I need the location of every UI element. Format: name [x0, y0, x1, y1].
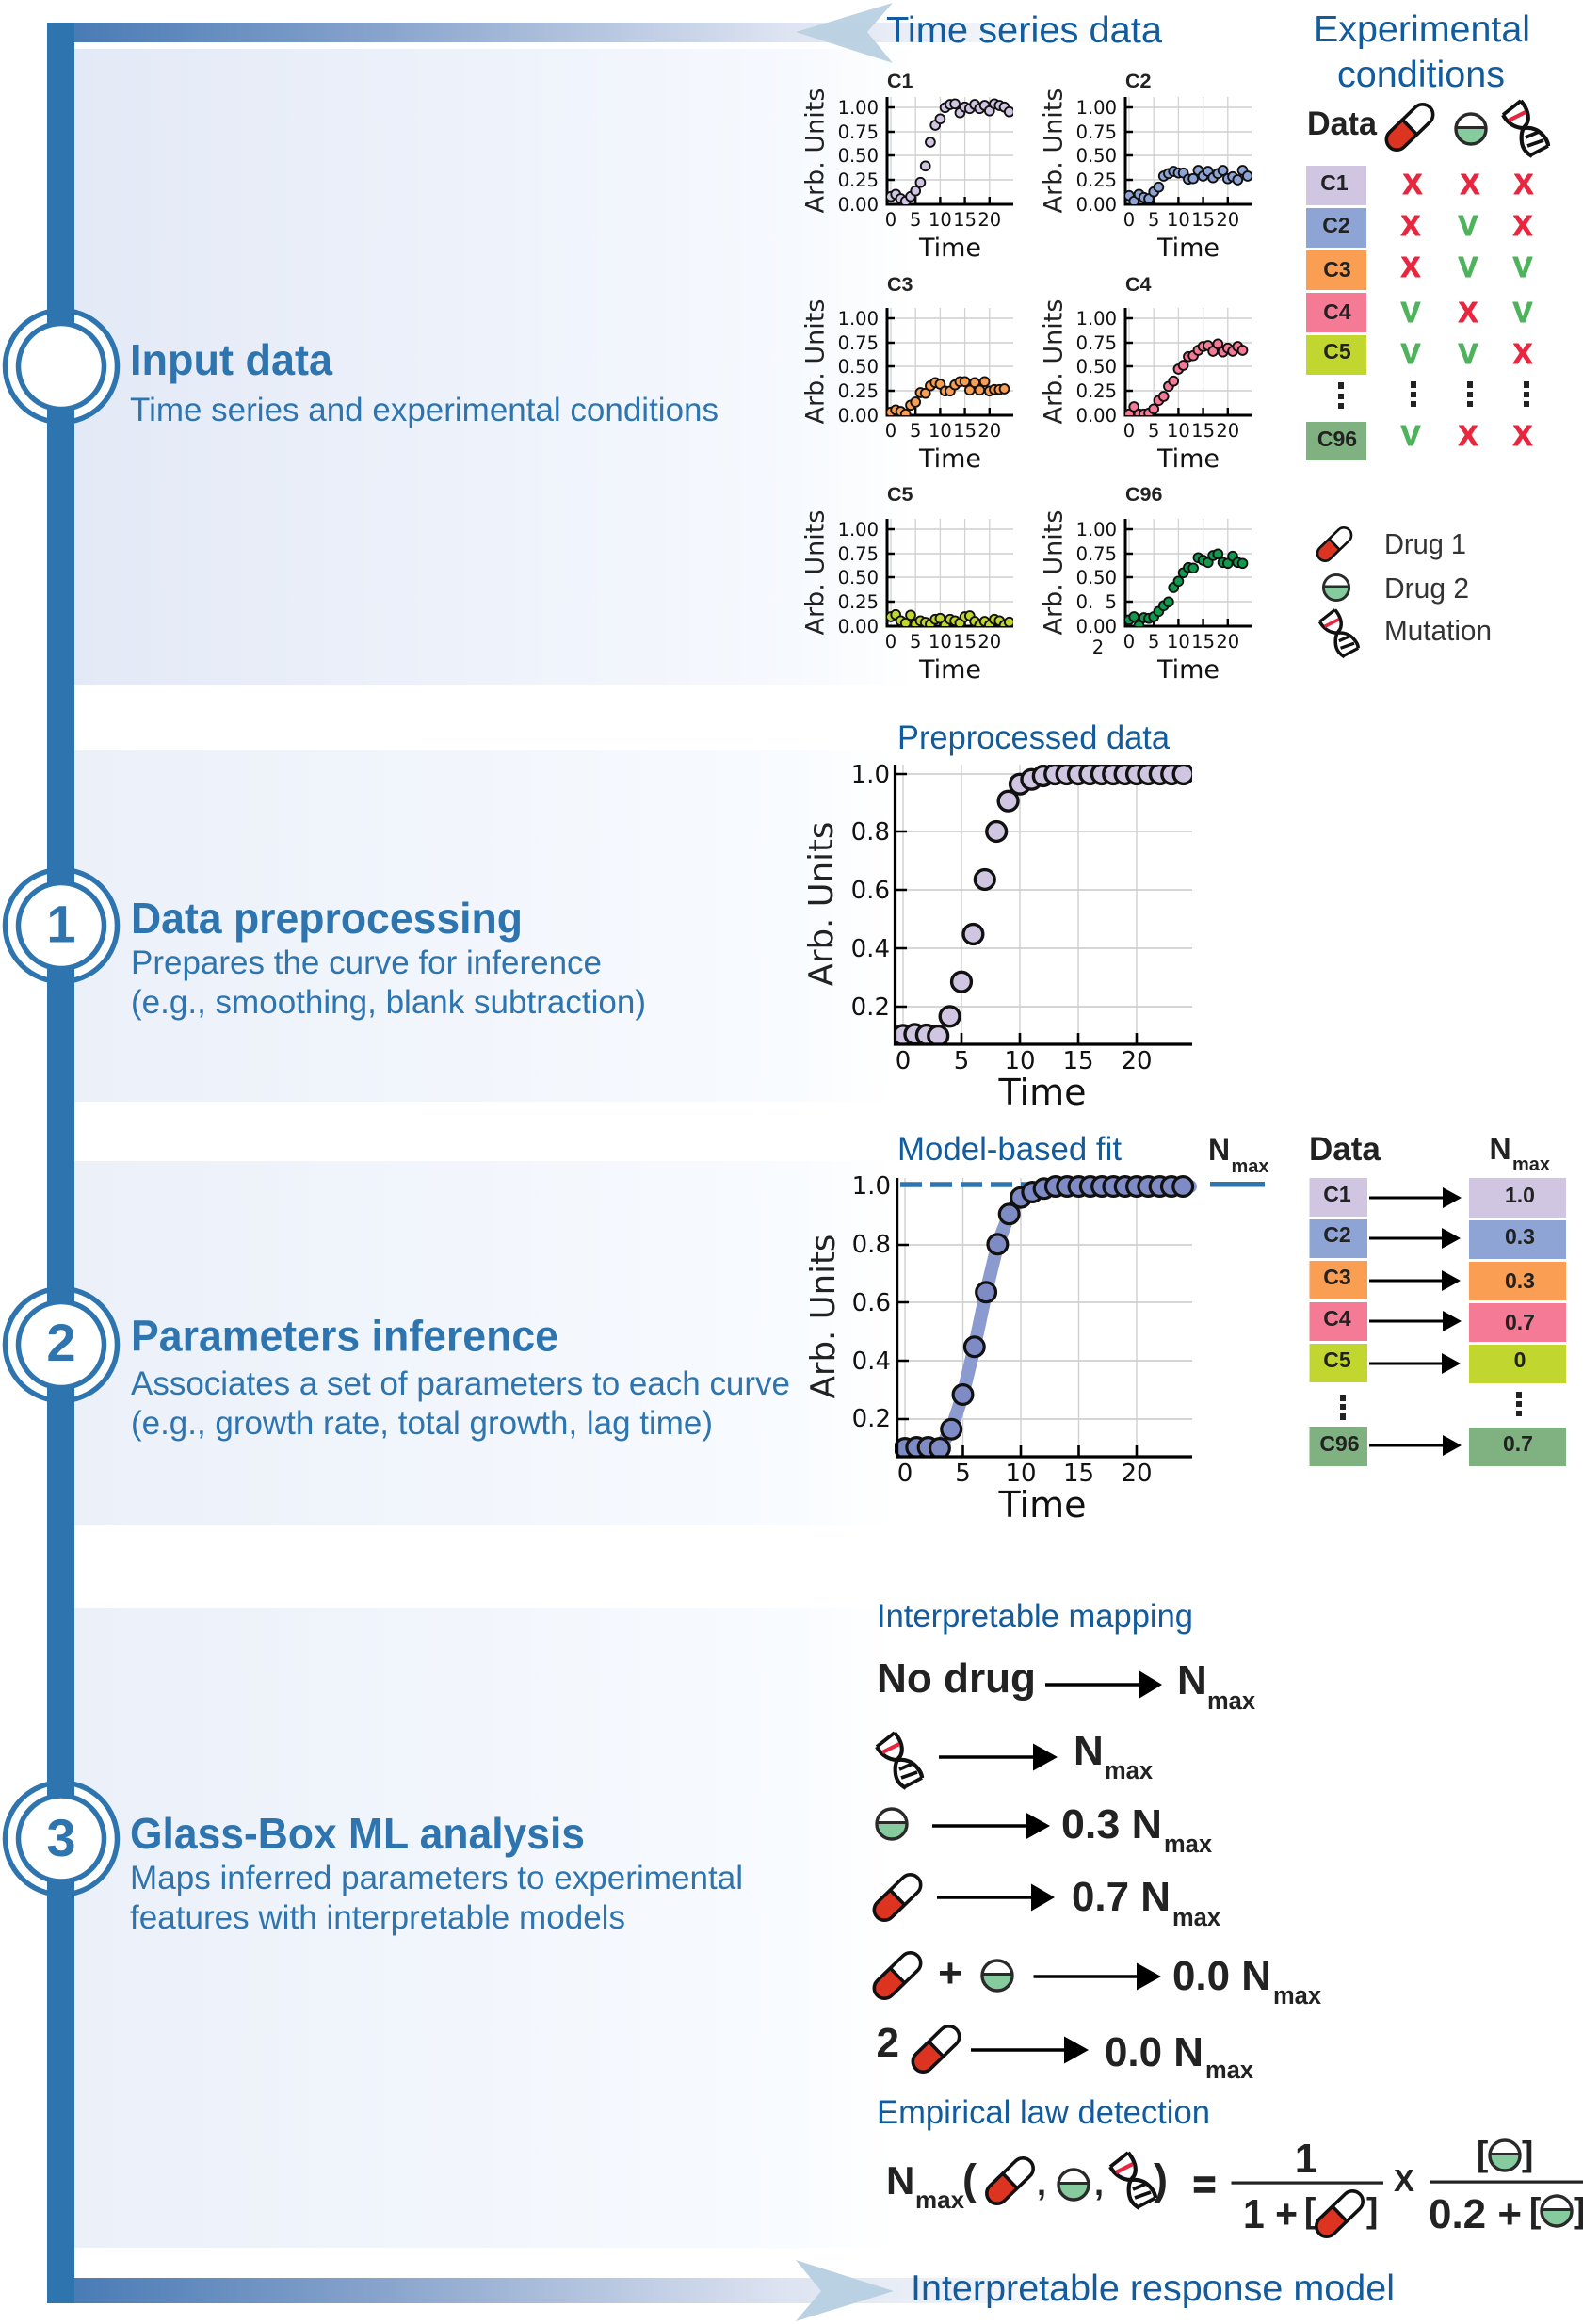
chart: C2 time series: 10	[1167, 209, 1190, 231]
chart: C3 time series	[800, 273, 1013, 474]
chart: C2 time series: 0.00	[1076, 194, 1117, 216]
chart: preprocessed data curve: 0.2	[851, 993, 890, 1022]
formula: empirical law: ,	[1037, 2164, 1046, 2203]
row C96: C96	[1317, 427, 1357, 451]
row C1: X	[1461, 168, 1480, 201]
legend: drug 1, drug 2, mutation	[1315, 525, 1492, 657]
chart: model-based fit curve: 0.4	[852, 1348, 891, 1376]
row C5: C5	[1323, 1348, 1351, 1372]
text block: parameters inference: Parameters inference	[131, 1311, 558, 1360]
Nmax line label: N	[1208, 1133, 1230, 1167]
bottom gradient band	[74, 2278, 1130, 2303]
mapping: drug 1 plus drug 2	[870, 1948, 1321, 2009]
row C3: C3	[1323, 257, 1351, 282]
chart: model-based fit curve: Time	[998, 1484, 1087, 1525]
formula: empirical law: [	[1477, 2135, 1488, 2173]
chart: preprocessed data curve: 20	[1121, 1047, 1153, 1075]
mapping: double drug 1: 2	[876, 2020, 899, 2066]
formula: empirical law: X	[1394, 2163, 1414, 2198]
chart: C5 time series: 0.00	[838, 616, 879, 637]
outer ring step 2	[6, 1288, 117, 1401]
formula: empirical law: [	[1529, 2191, 1541, 2230]
Nmax line label	[1208, 1133, 1269, 1186]
chart: C4 time series	[1040, 273, 1252, 474]
step badge: input data	[19, 324, 104, 409]
table: inferred Nmax per curve	[1309, 1131, 1566, 1466]
row C4: C4	[1323, 1306, 1351, 1331]
chart: C5 time series: 0	[885, 631, 896, 653]
text block: data preprocessing: (e.g., smoothing, blank subtraction)	[131, 983, 646, 1021]
table header	[1309, 1131, 1550, 1175]
mapping: no drug	[877, 1655, 1255, 1715]
chart: C3 time series: Time	[918, 444, 981, 474]
heading: experimental conditions	[1314, 9, 1530, 95]
chart: C4 time series: Time	[1156, 444, 1220, 474]
chart: C96 time series: 15	[1191, 631, 1215, 653]
top gradient band	[74, 23, 1130, 42]
formula: empirical law: 1	[1295, 2136, 1317, 2182]
chart: C2 time series: 20	[1216, 209, 1239, 231]
chart: preprocessed data curve: 0.8	[851, 818, 890, 847]
heading: interpretable mapping: Interpretable mapping	[877, 1598, 1193, 1635]
row C5	[1306, 335, 1533, 375]
step badge: 2	[19, 1301, 104, 1388]
step badge: 3: 3	[46, 1808, 76, 1867]
heading: time series data: Time series data	[886, 10, 1162, 51]
chart: C1 time series: 0.50	[838, 145, 879, 167]
mapping: double drug 1: max	[1205, 2058, 1253, 2084]
mapping: mutation: N	[1074, 1728, 1104, 1774]
chart: preprocessed data curve: 0	[896, 1047, 911, 1075]
chart: C4 time series: 20	[1216, 420, 1239, 442]
text block: input data: Time series and experimental conditions	[130, 391, 719, 428]
chart: model-based fit curve: 0.2	[852, 1405, 891, 1433]
row C1: X	[1514, 168, 1534, 201]
table: experimental conditions	[1306, 100, 1548, 460]
text block: glass-box ML analysis: Glass-Box ML analysis	[130, 1809, 585, 1858]
panel: input data background	[74, 49, 918, 685]
chart: C1 time series: 0.75	[838, 121, 879, 143]
chart: model-based fit curve: 0.8	[852, 1231, 891, 1259]
chart: model-based fit curve: 10	[1005, 1460, 1037, 1488]
arrow: top arrowhead pointing left	[796, 3, 893, 63]
chart: C3 time series: 0.25	[838, 380, 879, 402]
row C2: C2	[1323, 1222, 1351, 1247]
row C5: X	[1513, 337, 1533, 370]
chart: C4 time series: 0.25	[1076, 380, 1117, 402]
step badge: 1	[19, 883, 104, 968]
chart: C1 time series: 0.00	[838, 194, 879, 216]
row C5: C5	[1323, 339, 1351, 363]
chart: C4 time series: 15	[1191, 420, 1215, 442]
formula: empirical law: ,	[1094, 2164, 1104, 2203]
chart: C96 time series: C96	[1125, 483, 1162, 506]
chart: C1 time series: 0	[885, 209, 896, 231]
text block: parameters inference: (e.g., growth rate, total growth, lag time)	[131, 1404, 713, 1442]
text block: glass-box ML analysis: Maps inferred parameters to experimental	[130, 1859, 743, 1896]
chart: C96 time series: 0.00	[1076, 616, 1117, 637]
mapping: drug 1: max	[1172, 1905, 1220, 1931]
row C3: V	[1459, 250, 1478, 283]
row C4: V	[1401, 296, 1421, 329]
table header: max	[1512, 1154, 1550, 1175]
chart: C1 time series: Time	[918, 234, 981, 263]
step badge: 1: 1	[46, 895, 76, 953]
chart: C3 time series: 0.75	[838, 332, 879, 354]
chart: C96 time series: 0.75	[1076, 543, 1117, 565]
table header: Data	[1309, 1131, 1381, 1168]
chart: C2 time series: 0.50	[1076, 145, 1117, 167]
formula: empirical law: (	[962, 2155, 977, 2203]
row C2: X	[1513, 209, 1533, 242]
chart: preprocessed data curve: 10	[1004, 1047, 1036, 1075]
chart: C3 time series: 0.00	[838, 405, 879, 427]
ellipsis row	[1343, 1392, 1519, 1420]
formula: empirical law: 0.2 +	[1429, 2191, 1522, 2237]
outer ring step 0	[6, 311, 117, 422]
chart: C1 time series: 0.25	[838, 169, 879, 191]
text block: data preprocessing: Prepares the curve for inference	[131, 944, 602, 981]
chart: C5 time series: 1.00	[838, 519, 879, 541]
table header	[1307, 100, 1548, 156]
chart: C2 time series	[1040, 70, 1252, 263]
row C96	[1309, 1427, 1566, 1466]
chart: C96 time series: 0.50	[1076, 567, 1117, 589]
chart: C4 time series: 0	[1123, 420, 1135, 442]
formula: empirical law: [	[1304, 2191, 1316, 2230]
row C1	[1306, 166, 1534, 205]
legend: drug 1, drug 2, mutation: Mutation	[1384, 614, 1492, 647]
chart: C96 time series: 0	[1123, 631, 1135, 653]
row C1: X	[1403, 168, 1423, 201]
chart: C1 time series: 1.00	[838, 97, 879, 119]
chart: C4 time series: 10	[1167, 420, 1190, 442]
mapping: drug 1: 0.7 N	[1072, 1874, 1171, 1920]
formula: empirical law: ]	[1522, 2135, 1533, 2173]
chart: C3 time series: 15	[953, 420, 977, 442]
mapping: no drug: max	[1207, 1688, 1255, 1715]
row C2	[1306, 208, 1533, 248]
mapping: drug 1	[870, 1870, 1220, 1931]
formula: empirical law: )	[1154, 2155, 1168, 2203]
chart: preprocessed data curve: Time	[998, 1072, 1087, 1113]
row C1: C1	[1323, 1182, 1351, 1206]
formula: empirical law: =	[1193, 2162, 1216, 2206]
row C2: 0.3	[1505, 1224, 1535, 1249]
row C4: V	[1513, 296, 1533, 329]
table header: N	[1490, 1132, 1511, 1166]
chart: C96 time series: 20	[1216, 631, 1239, 653]
text block: glass-box ML analysis: features with interpretable models	[130, 1898, 625, 1936]
row C5: V	[1459, 337, 1478, 370]
row C3: 0.3	[1505, 1268, 1535, 1293]
row C1: C1	[1320, 170, 1349, 195]
mapping: mutation	[877, 1728, 1153, 1788]
formula: empirical law: N	[886, 2158, 914, 2203]
row C5: 0	[1514, 1348, 1526, 1372]
chart: C5 time series: 20	[977, 631, 1001, 653]
mapping: double drug 1	[876, 2020, 1253, 2084]
chart: C2 time series: 0.25	[1076, 169, 1117, 191]
chart: C1 time series: Arb. Units	[800, 89, 831, 213]
outer ring step 1	[6, 870, 117, 981]
text block: input data: Input data	[130, 335, 332, 384]
mapping: drug 1 plus drug 2: 0.0 N	[1172, 1953, 1271, 1999]
mapping: drug 2: 0.3 N	[1061, 1801, 1162, 1848]
row C4: X	[1459, 296, 1478, 329]
chart: C5 time series: 15	[953, 631, 977, 653]
mapping: no drug: No drug	[877, 1655, 1036, 1702]
row C96: V	[1401, 419, 1421, 452]
chart: C3 time series: 10	[929, 420, 952, 442]
chart: C2 time series: C2	[1125, 70, 1152, 92]
mapping: drug 2: max	[1164, 1832, 1212, 1858]
row C1: 1.0	[1505, 1183, 1535, 1207]
row C2: X	[1401, 209, 1421, 242]
mapping: drug 1 plus drug 2: +	[938, 1950, 962, 1996]
row C96: C96	[1319, 1431, 1360, 1456]
chart: C5 time series: Time	[918, 655, 981, 685]
chart: C3 time series: 1.00	[838, 308, 879, 330]
row C4	[1306, 293, 1533, 332]
chart: C5 time series: 0.75	[838, 543, 879, 565]
chart: C1 time series: 20	[977, 209, 1001, 231]
chart: C4 time series: 0.00	[1076, 405, 1117, 427]
mapping: no drug: N	[1177, 1657, 1207, 1703]
row C5: V	[1401, 337, 1421, 370]
chart: C2 time series: 0	[1123, 209, 1135, 231]
row C4	[1309, 1302, 1566, 1342]
chart: preprocessed data curve: 0.6	[851, 877, 890, 905]
chart: C3 time series: 20	[977, 420, 1001, 442]
heading: empirical law detection: Empirical law detection	[877, 2094, 1210, 2131]
heading: preprocessed data: Preprocessed data	[897, 719, 1171, 756]
chart: model-based fit curve: 5	[955, 1460, 971, 1488]
text block: input data	[130, 335, 719, 428]
row C3	[1306, 250, 1533, 290]
chart: model-based fit curve	[804, 1172, 1198, 1525]
chart: model-based fit curve: 15	[1063, 1460, 1094, 1488]
chart: C5 time series: 0.25	[838, 591, 879, 613]
chart: C2 time series: 1.00	[1076, 97, 1117, 119]
legend: drug 1, drug 2, mutation: Drug 2	[1384, 572, 1469, 605]
chart: model-based fit curve: 20	[1121, 1460, 1153, 1488]
panel: data preprocessing background	[74, 750, 895, 1102]
row C3: V	[1513, 250, 1533, 283]
legend: drug 1, drug 2, mutation: Drug 1	[1384, 527, 1466, 560]
chart: C96 time series: 2	[1092, 637, 1104, 658]
Nmax line label: max	[1232, 1156, 1269, 1177]
chart: C4 time series: 0.50	[1076, 356, 1117, 378]
chart: C2 time series: Time	[1156, 234, 1220, 263]
text block: data preprocessing	[131, 894, 646, 1021]
mapping: mutation: max	[1105, 1758, 1153, 1784]
arrow: bottom arrowhead pointing right	[796, 2260, 894, 2321]
chart: C3 time series: 0	[885, 420, 896, 442]
formula: empirical law: 1 +	[1243, 2191, 1298, 2237]
panel: glass-box ML analysis background	[74, 1608, 895, 2248]
panel: parameters inference background	[74, 1161, 895, 1525]
heading: interpretable response model: Interpretable response model	[911, 2268, 1395, 2309]
vertical pipeline bar	[47, 23, 74, 2303]
chart: C96 time series: Time	[1156, 655, 1220, 685]
formula: empirical law: max	[915, 2186, 965, 2214]
formula: empirical law: ]	[1366, 2191, 1378, 2230]
chart: C3 time series: C3	[887, 273, 913, 296]
chart: model-based fit curve: 0.6	[852, 1289, 891, 1317]
chart: C5 time series: Arb. Units	[800, 510, 831, 635]
chart: C1 time series: 10	[929, 209, 952, 231]
chart: C96 time series: 10	[1167, 631, 1190, 653]
chart: C96 time series: 5	[1148, 631, 1159, 653]
chart: C5 time series: 0.50	[838, 567, 879, 589]
table header: Data	[1307, 105, 1378, 142]
heading: model-based fit: Model-based fit	[897, 1131, 1122, 1168]
text block: parameters inference	[131, 1311, 790, 1442]
mapping: drug 2	[877, 1801, 1212, 1858]
mapping: drug 1 plus drug 2: max	[1273, 1983, 1321, 2009]
chart: C2 time series: 5	[1148, 209, 1159, 231]
chart: C3 time series: 5	[910, 420, 921, 442]
row C2: V	[1459, 209, 1478, 242]
text block: data preprocessing: Data preprocessing	[131, 894, 523, 943]
chart: model-based fit curve: 0	[897, 1460, 913, 1488]
chart: preprocessed data curve: 0.4	[851, 935, 890, 963]
row C96: X	[1459, 419, 1478, 452]
row C3	[1309, 1261, 1566, 1300]
chart: C4 time series: 1.00	[1076, 308, 1117, 330]
chart: C4 time series: C4	[1125, 273, 1152, 296]
row C3: C3	[1323, 1265, 1351, 1289]
row C5	[1309, 1344, 1566, 1383]
ellipsis row	[1341, 381, 1526, 409]
chart: C2 time series: 15	[1191, 209, 1215, 231]
row C3: X	[1401, 250, 1421, 283]
formula: empirical law	[886, 2135, 1583, 2241]
text block: parameters inference: Associates a set of parameters to each curve	[131, 1364, 790, 1402]
chart: C1 time series	[800, 70, 1014, 263]
chart: preprocessed data curve: Arb. Units	[802, 822, 841, 986]
row C2	[1309, 1219, 1566, 1259]
chart: C5 time series: 10	[929, 631, 952, 653]
chart: C1 time series: 5	[910, 209, 921, 231]
row C1	[1309, 1178, 1566, 1218]
step badge: 2: 2	[46, 1313, 76, 1372]
chart: preprocessed data curve: 15	[1062, 1047, 1094, 1075]
chart: C2 time series: 0.75	[1076, 121, 1117, 143]
chart: C4 time series: 5	[1148, 420, 1159, 442]
chart: preprocessed data curve: 5	[954, 1047, 969, 1075]
heading: experimental conditions: Experimental	[1314, 9, 1530, 50]
row C2: C2	[1322, 213, 1350, 237]
chart: C5 time series: C5	[887, 483, 913, 506]
outer ring step 3	[6, 1783, 117, 1895]
row C4: 0.7	[1505, 1310, 1535, 1334]
chart: preprocessed data curve: 1.0	[851, 761, 890, 789]
row C4: C4	[1323, 299, 1351, 324]
chart: model-based fit curve: Arb. Units	[804, 1235, 843, 1398]
chart: C96 time series: 1.00	[1076, 519, 1117, 541]
chart: C4 time series: 0.75	[1076, 332, 1117, 354]
chart: C4 time series: Arb. Units	[1040, 299, 1068, 424]
heading: experimental conditions: conditions	[1337, 55, 1505, 95]
row C96: 0.7	[1503, 1431, 1533, 1456]
chart: C96 time series: 0. 5	[1076, 591, 1117, 613]
chart: C96 time series: Arb. Units	[1040, 510, 1068, 635]
chart: C96 time series	[1040, 483, 1252, 685]
row C96	[1306, 419, 1533, 460]
chart: C3 time series: Arb. Units	[800, 299, 831, 424]
row C96: X	[1513, 419, 1533, 452]
chart: preprocessed data curve	[802, 761, 1193, 1113]
step badge: 3	[19, 1796, 104, 1881]
chart: C2 time series: Arb. Units	[1040, 89, 1068, 213]
mapping: double drug 1: 0.0 N	[1105, 2029, 1203, 2075]
chart: C5 time series	[800, 483, 1014, 685]
text block: glass-box ML analysis	[130, 1809, 743, 1936]
chart: C1 time series: 15	[953, 209, 977, 231]
chart: C3 time series: 0.50	[838, 356, 879, 378]
chart: model-based fit curve: 1.0	[852, 1172, 891, 1201]
chart: C5 time series: 5	[910, 631, 921, 653]
chart: C1 time series: C1	[887, 70, 913, 92]
